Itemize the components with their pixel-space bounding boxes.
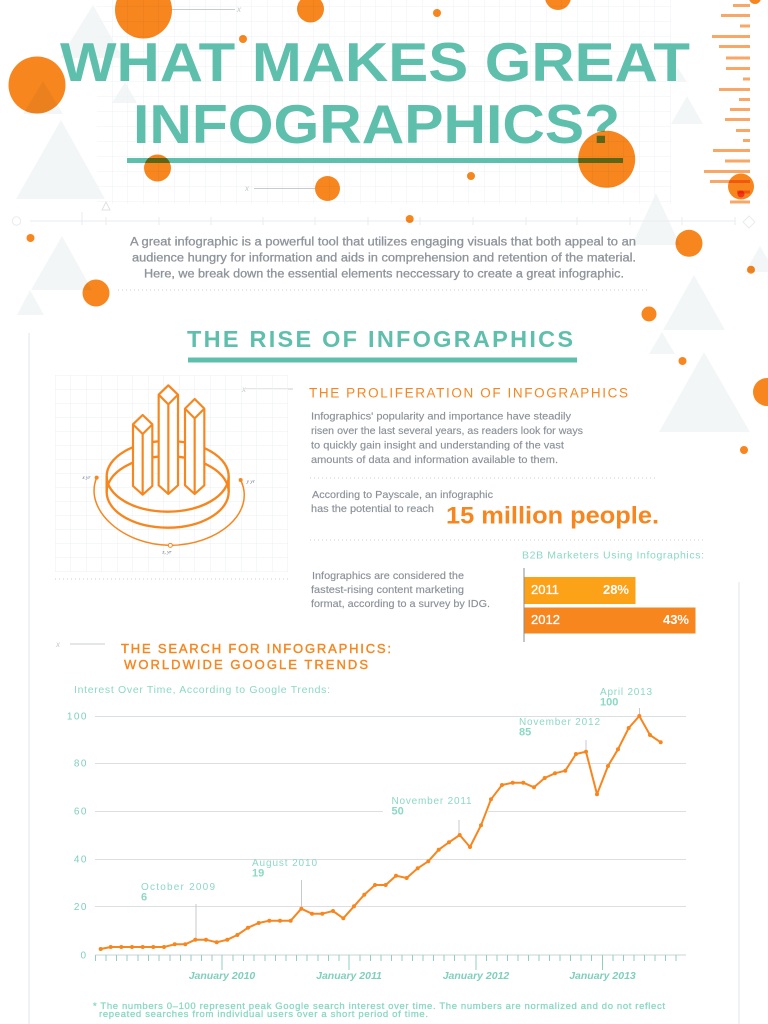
bar chart: B2B marketers: 28% (603, 582, 629, 597)
line chart: Google Trends: Interest Over Time, According to Google Trends: (74, 684, 330, 696)
orange circles (8, 0, 768, 454)
IDG text: Infographics are considered the (312, 570, 464, 582)
section heading: THE RISE OF INFOGRAPHICS (187, 326, 573, 352)
line chart: Google Trends: 60 (74, 806, 88, 818)
search heading (121, 641, 391, 672)
payscale callout: According to Payscale, an infographic (312, 489, 493, 501)
annotation: November 2011 (392, 796, 472, 818)
background triangles (16, 5, 768, 432)
proliferation text: risen over the last several years, as readers look for ways (311, 425, 583, 437)
intro text: Here, we break down the essential elements neccessary to create a great infographic. (144, 268, 624, 280)
pointer lines with x marks: x (241, 385, 247, 394)
annotation: April 2013: April 2013 (600, 687, 652, 698)
line chart: Google Trends: January 2013 (569, 970, 636, 982)
line chart: Google Trends: 40 (74, 854, 88, 866)
data line (99, 714, 663, 951)
intro text: audience hungry for information and aids in comprehension and retention of the material. (132, 252, 636, 264)
illustration: isometric bars on disc: z, yr (161, 549, 172, 555)
IDG text (311, 570, 490, 610)
annotation: August 2010: 19 (252, 868, 264, 880)
annotation: October 2009: 6 (141, 892, 147, 904)
footnote: * The numbers 0–100 represent peak Google search interest over time. The numbers are normalized and do not reflect (93, 1001, 665, 1012)
illustration: isometric bars on disc (55, 375, 288, 572)
search heading: THE SEARCH FOR INFOGRAPHICS: (121, 641, 391, 656)
payscale callout (311, 489, 659, 530)
title (60, 31, 690, 163)
annotation: November 2011: 50 (392, 806, 404, 818)
pointer lines with x marks (55, 5, 315, 649)
line chart: Google Trends: 0 (80, 950, 86, 962)
annotation: November 2011: November 2011 (392, 796, 472, 807)
annotation: November 2012 (519, 717, 600, 738)
annotation: October 2009 (141, 882, 215, 904)
IDG text: fastest-rising content marketing (311, 584, 464, 596)
annotation: April 2013: 100 (600, 696, 618, 708)
proliferation text (311, 410, 583, 466)
proliferation text: amounts of data and information available to them. (311, 454, 558, 466)
proliferation text: to quickly gain insight and understanding of the vast (311, 440, 564, 452)
line chart: Google Trends (67, 684, 686, 982)
payscale callout: has the potential to reach (311, 503, 434, 515)
side bar histogram (704, 4, 750, 204)
pointer lines with x marks: x (244, 184, 250, 193)
bar chart: B2B marketers: 43% (663, 612, 689, 627)
IDG text: format, according to a survey by IDG. (311, 598, 490, 610)
annotation: November 2012: November 2012 (519, 717, 600, 728)
line chart: Google Trends: 100 (67, 712, 88, 722)
pointer lines with x marks: x (236, 5, 242, 14)
circle over histogram (728, 174, 754, 200)
bar chart: B2B marketers: 2011 (531, 582, 559, 597)
payscale callout: 15 million people. (446, 502, 659, 530)
pointer lines with x marks: x (55, 640, 61, 649)
illustration: isometric bars on disc: x yr (81, 475, 91, 481)
annotation: October 2009: October 2009 (141, 882, 215, 893)
line chart: Google Trends: 80 (74, 758, 88, 770)
proliferation text: Infographics' popularity and importance have steadily (311, 410, 572, 422)
intro text: A great infographic is a powerful tool that utilizes engaging visuals that both appeal to an (130, 236, 636, 248)
header grid (97, 0, 671, 204)
title: WHAT MAKES GREAT (60, 31, 690, 93)
footnote: repeated searches from individual users over a short period of time. (99, 1009, 428, 1020)
search heading: WORLDWIDE GOOGLE TRENDS (124, 657, 368, 672)
annotation: November 2012: 85 (519, 726, 531, 738)
line chart: Google Trends: January 2012 (443, 970, 509, 982)
bar chart: B2B marketers: 2012 (531, 612, 560, 627)
line chart: Google Trends: January 2011 (316, 970, 382, 982)
annotation: August 2010 (252, 858, 317, 880)
illustration: isometric bars on disc: y yr (246, 479, 256, 485)
footnote (93, 1001, 665, 1020)
proliferation heading: THE PROLIFERATION OF INFOGRAPHICS (309, 386, 628, 400)
line chart: Google Trends: January 2010 (189, 970, 255, 982)
annotation: August 2010: August 2010 (252, 858, 317, 869)
annotation: April 2013 (600, 687, 652, 708)
title: INFOGRAPHICS? (133, 93, 620, 155)
timeline axis (12, 202, 755, 228)
intro text (130, 236, 636, 280)
bar chart: B2B marketers: B2B Marketers Using Infographics: (522, 550, 704, 562)
line chart: Google Trends: 20 (74, 902, 88, 913)
bar chart: B2B marketers (522, 550, 704, 642)
